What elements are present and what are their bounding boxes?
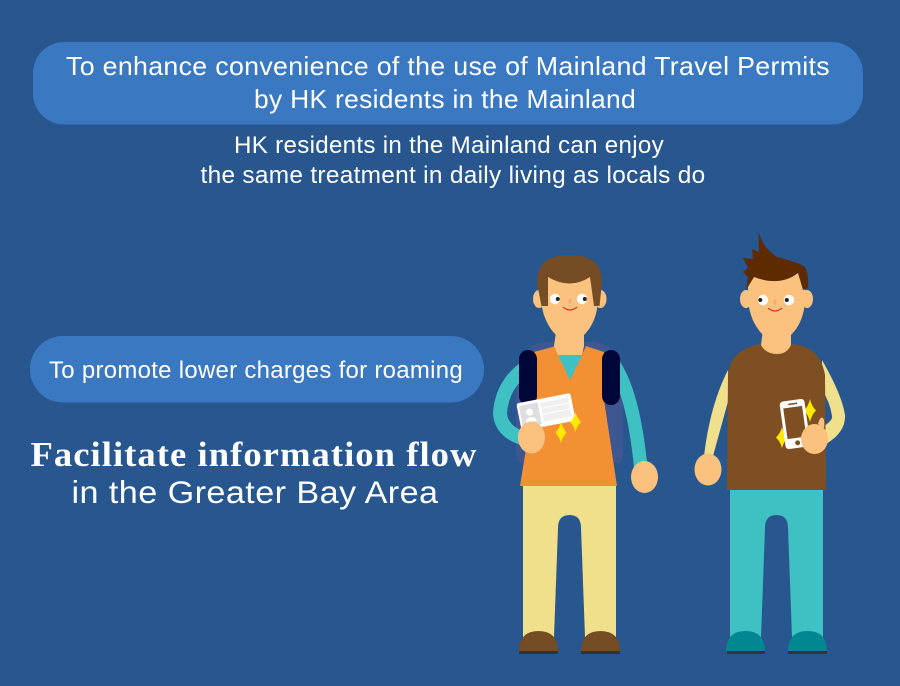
nose (568, 298, 572, 304)
smartphone (779, 398, 811, 450)
ears (740, 290, 752, 308)
hands (818, 418, 824, 428)
heading: facilitate information flow: Facilitate information flow (30, 435, 477, 474)
heading: facilitate information flow (30, 435, 477, 510)
figure: man with smartphone (694, 232, 845, 654)
left arm (500, 368, 525, 439)
face (541, 270, 598, 336)
top pill panel (33, 42, 863, 124)
pill heading (66, 51, 830, 114)
hair (743, 232, 808, 290)
figure: man with permit card (500, 255, 658, 654)
mouth (563, 307, 577, 310)
neck (761, 330, 791, 354)
trousers (523, 486, 616, 640)
roaming pill panel: To promote lower charges for roaming (49, 357, 463, 384)
left sleeve (704, 370, 729, 456)
mouth (768, 308, 782, 311)
pill heading: by HK residents in the Mainland (254, 84, 636, 114)
trousers (730, 488, 823, 640)
vest (520, 346, 617, 486)
neck (554, 332, 584, 355)
sparkles (556, 412, 581, 443)
shirt (727, 344, 826, 490)
ears (533, 290, 545, 308)
right arm (614, 365, 641, 470)
permit card (516, 393, 576, 431)
hands (518, 422, 545, 454)
subheading text: HK residents in the Mainland can enjoy (234, 132, 664, 159)
nose (774, 299, 776, 305)
eyes (758, 295, 768, 305)
hair (537, 255, 602, 306)
roaming pill panel (30, 336, 484, 402)
heading: facilitate information flow: in the Greater Bay Area (72, 474, 439, 510)
backpack halo (516, 342, 623, 463)
right sleeve (822, 360, 845, 444)
shoes (519, 631, 620, 654)
t-shirt collar (558, 355, 582, 380)
pill heading: To enhance convenience of the use of Mainland Travel Permits (66, 51, 830, 81)
face (748, 270, 805, 336)
subheading text (200, 132, 706, 189)
eyes (550, 294, 560, 304)
subheading text: the same treatment in daily living as locals do (200, 162, 706, 189)
shoes (726, 631, 827, 654)
straps (519, 350, 537, 405)
sparkles (776, 399, 816, 448)
